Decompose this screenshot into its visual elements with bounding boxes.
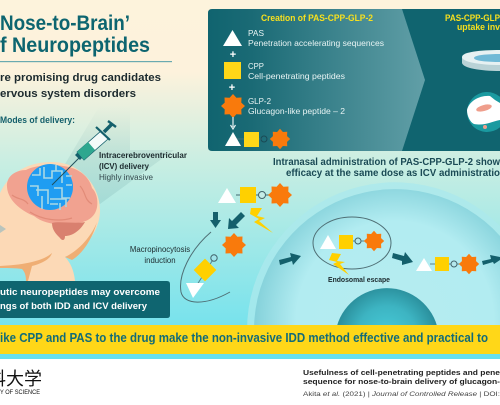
icon: PAS triangle (223, 30, 242, 46)
icon: GLP-2 star (221, 94, 245, 118)
title: f Neuropeptides (0, 33, 150, 57)
icon: ICV syringe (52, 121, 116, 185)
ICV delivery text: Highly invasive (99, 172, 153, 182)
modes of delivery label: Modes of delivery: (0, 115, 75, 125)
callout: neuropeptides overcome (0, 281, 170, 318)
ICV delivery text (99, 150, 188, 182)
panel: creation of PAS-CPP-GLP-2: + (229, 82, 235, 94)
macropinocytosis induction label (130, 245, 190, 265)
intranasal result heading: efficacy at the same dose as ICV administratio (286, 168, 500, 179)
molecule in endosome (320, 231, 384, 251)
arrow: out of endosome (392, 252, 413, 265)
macropinocytosis vesicle (181, 232, 246, 302)
peptide descriptions: GLP-2 (248, 96, 271, 106)
title: Nose-to-Brain’ (0, 11, 130, 35)
panel: creation of PAS-CPP-GLP-2: + (230, 49, 236, 61)
icon: conjugate (225, 129, 290, 149)
footer (0, 359, 500, 405)
molecule above membrane (218, 183, 292, 207)
back of head shadow (65, 222, 97, 260)
icon: IDD nasal spray (0, 225, 6, 233)
cell with endosome (247, 182, 500, 330)
macropinocytosis induction label: induction (144, 256, 176, 265)
arrow: into endosome (279, 253, 301, 265)
panel: creation of PAS-CPP-GLP-2: Creation of PAS-CPP-GLP-2 (261, 13, 373, 23)
nucleus (336, 288, 438, 330)
peptide descriptions (248, 28, 384, 116)
intranasal result heading (273, 157, 500, 179)
peptide descriptions: CPP (248, 61, 264, 71)
head with brain (0, 162, 100, 281)
macropinocytosis induction label: Macropinocytosis (130, 245, 190, 254)
title (0, 11, 150, 57)
injection light beam (52, 105, 174, 204)
icon: mouse (467, 92, 500, 132)
arrows into macropinocytosis (210, 212, 245, 229)
icon: CPP square (224, 62, 241, 79)
peptide descriptions: Penetration accelerating sequences (248, 38, 384, 48)
brain (7, 165, 97, 224)
callout: neuropeptides overcome: utic neuropeptides may overcome (0, 287, 160, 298)
arrow: onward (482, 255, 500, 265)
citation (303, 368, 500, 398)
icon: petri dish (462, 50, 500, 71)
endosomal escape label: Endosomal escape (328, 277, 390, 284)
peptide descriptions: Glucagon-like peptide – 2 (248, 106, 345, 116)
free molecule in cytoplasm (416, 254, 479, 274)
ICV delivery text: (ICV) delivery (99, 161, 149, 171)
endosome membrane (313, 217, 391, 269)
icon: lightning membrane (250, 208, 273, 233)
university logo: Y OF SCIENCE (0, 390, 40, 396)
subtitle: re promising drug candidates (0, 72, 161, 84)
ICV delivery text: Intracerebroventricular (99, 150, 188, 160)
uptake heading (445, 13, 500, 32)
panel: creation of PAS-CPP-GLP-2 (208, 9, 500, 151)
peptide descriptions: PAS (248, 28, 264, 38)
subtitle: ervous system disorders (0, 88, 136, 100)
callout: neuropeptides overcome: ngs of both IDD and ICV delivery (0, 301, 148, 312)
peptide descriptions: Cell-penetrating peptides (248, 71, 345, 81)
icon: lightning endosome (329, 253, 349, 275)
arrow: combine down (230, 117, 236, 129)
jaw shadow (0, 253, 52, 281)
citation: sequence for nose-to-brain delivery of glucagon- (303, 377, 500, 386)
citation: Usefulness of cell-penetrating peptides and pene (303, 368, 500, 377)
takeaway banner (0, 325, 500, 354)
subtitle (0, 72, 161, 100)
citation: Akita et al. (2021) | Journal of Controlled Release | DOI: (303, 391, 500, 398)
brain blue region (27, 164, 73, 210)
